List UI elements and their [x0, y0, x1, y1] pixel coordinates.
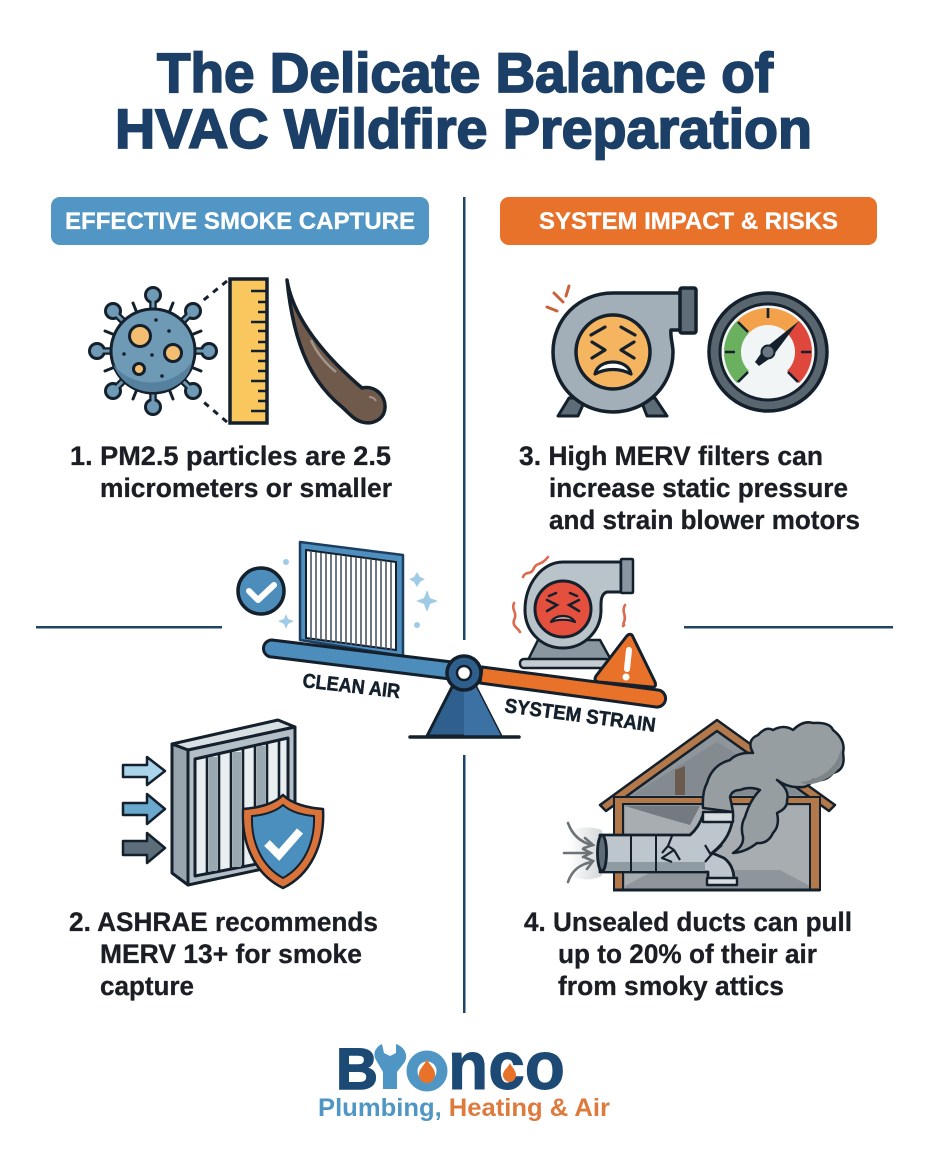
icon: beam right (orange): [480, 667, 666, 707]
heading: effective smoke capture: EFFECTIVE SMOKE CAPTURE: [65, 208, 415, 235]
heading: effective smoke capture: [51, 197, 429, 245]
icon: pressure gauge: [709, 293, 827, 411]
heading: system impact and risks: SYSTEM IMPACT & RISKS: [539, 208, 838, 235]
icon: airflow arrows: [123, 757, 165, 863]
label: system strain: SYSTEM STRAIN: [503, 695, 657, 737]
icon: fulcrum: [410, 656, 519, 737]
title: HVAC Wildfire Preparation: [115, 97, 812, 160]
icon: beam left (blue): [264, 640, 452, 679]
icon: pleated filter: [172, 720, 295, 885]
icon: hair: [287, 280, 385, 423]
icon: check badge: [238, 568, 284, 614]
icon: clean filter: [300, 542, 403, 656]
text block: point 1: [70, 441, 392, 503]
logo: Bronco Plumbing, Heating & Air: [318, 1028, 610, 1122]
title: The Delicate Balance of: [157, 41, 773, 104]
icon: shield: [243, 795, 323, 888]
text block: point 2: capture: [100, 971, 194, 1001]
text block: point 2: MERV 13+ for smoke: [100, 939, 362, 969]
icon: attic house: [568, 720, 835, 890]
logo wordmark: [336, 1028, 565, 1104]
label: clean air: CLEAN AIR: [301, 670, 402, 703]
icon: cracked duct: [598, 812, 737, 885]
text block: point 3: 3. High MERV filters can: [519, 441, 823, 471]
text block: point 4: up to 20% of their air: [558, 939, 817, 969]
icon: PM2.5 particle, ruler and hair: [90, 279, 385, 423]
heading: system impact and risks: [500, 197, 877, 245]
text block: point 1: 1. PM2.5 particles are 2.5: [70, 441, 391, 471]
icon: strained small blower: [513, 557, 633, 668]
icon: sparkles: [278, 559, 438, 629]
logo wordmark: B: [336, 1037, 378, 1102]
icon: MERV filter with arrows and shield: [123, 720, 323, 888]
text block: point 3: [519, 441, 860, 535]
icon: warning triangle: [595, 634, 656, 687]
icon: leaky duct in smoky attic: [564, 720, 844, 890]
text block: point 4: [524, 907, 852, 1001]
logo wordmark: nco: [448, 1028, 565, 1104]
text block: point 2: [69, 907, 378, 1001]
text block: point 4: from smoky attics: [558, 971, 784, 1001]
logo tagline: Plumbing, Heating & Air: [318, 1094, 610, 1122]
icon: airflow arrows into duct: [564, 823, 593, 882]
icon: particle: [90, 288, 216, 414]
icon: ruler: [230, 279, 267, 423]
text block: point 1: micrometers or smaller: [100, 473, 392, 503]
icon: strained blower and pressure gauge: [547, 286, 827, 416]
text block: point 4: 4. Unsealed ducts can pull: [524, 907, 852, 937]
text block: point 3: increase static pressure: [549, 473, 848, 503]
text block: point 2: 2. ASHRAE recommends: [69, 907, 378, 937]
icon: balance scale: [238, 542, 666, 737]
icon: strained blower: [547, 286, 696, 416]
title: [115, 41, 812, 160]
text block: point 3: and strain blower motors: [549, 505, 860, 535]
icon: smoke: [703, 722, 844, 853]
